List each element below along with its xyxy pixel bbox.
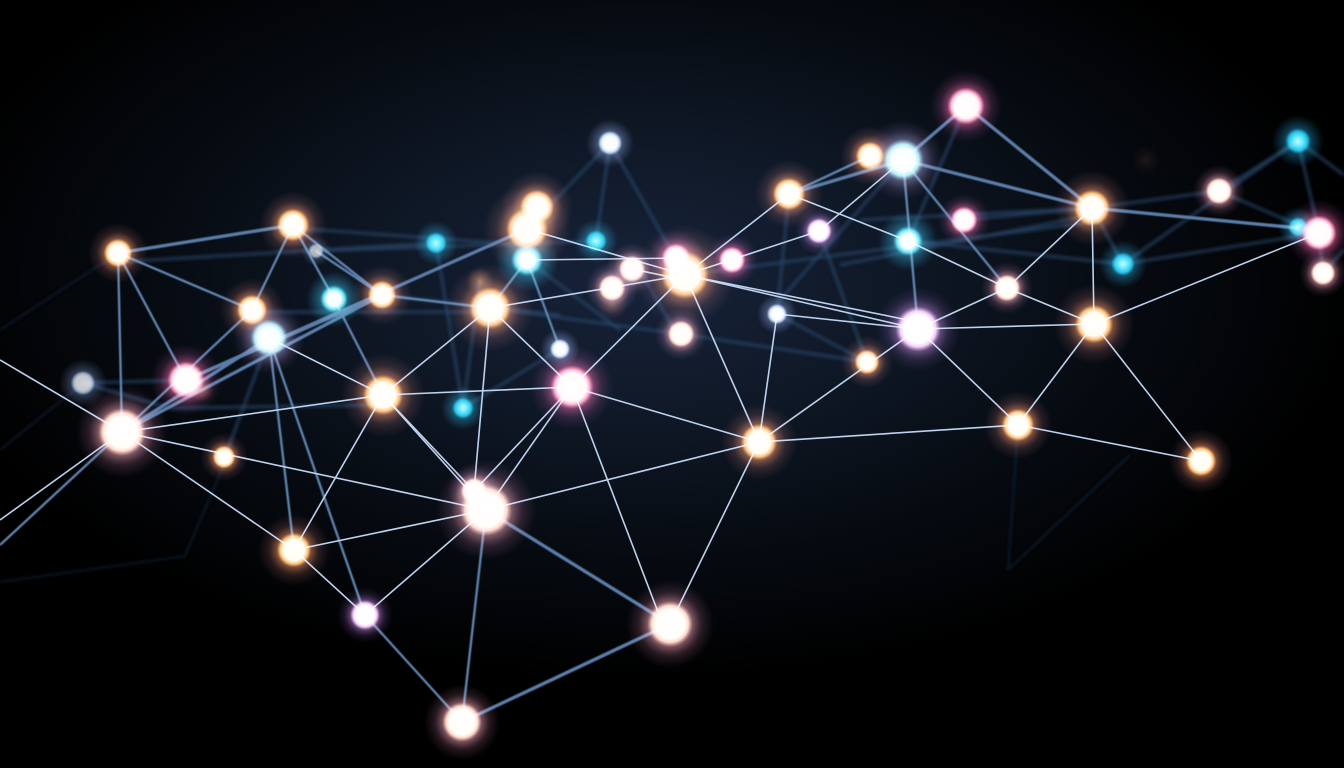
node white bbox=[1193, 165, 1245, 217]
node large white bbox=[76, 386, 168, 478]
node orange bbox=[984, 391, 1052, 459]
soft out-of-focus spots bbox=[188, 146, 1160, 402]
bright links bbox=[0, 160, 1319, 624]
node orange bbox=[501, 171, 573, 243]
node pink bbox=[938, 194, 990, 246]
node cyan bbox=[1278, 207, 1318, 247]
node orange large bbox=[446, 264, 534, 352]
node orange bbox=[88, 223, 148, 283]
node pink white bbox=[1285, 199, 1344, 267]
node large white orange bbox=[483, 185, 571, 273]
node cyan large bbox=[495, 228, 559, 292]
node faint white bbox=[301, 236, 331, 266]
node cyan bbox=[414, 221, 458, 265]
node orange small bbox=[586, 262, 638, 314]
node violet white bbox=[337, 587, 393, 643]
node white bbox=[586, 119, 634, 167]
node pink white bbox=[530, 345, 614, 429]
node white bbox=[606, 243, 658, 295]
node white bbox=[981, 262, 1033, 314]
node orange bbox=[259, 191, 327, 259]
node cyan bbox=[1099, 240, 1147, 288]
node cyan bbox=[878, 211, 938, 271]
node pink orange bbox=[706, 234, 758, 286]
node orange small bbox=[841, 336, 893, 388]
node orange bbox=[840, 126, 900, 186]
node orange large bbox=[1054, 284, 1134, 364]
node orange bbox=[220, 278, 284, 342]
node orange bbox=[258, 514, 330, 586]
node orange bbox=[721, 404, 797, 480]
node small top hub bbox=[648, 230, 704, 286]
node large white pink bbox=[626, 580, 714, 668]
node pink bbox=[150, 344, 222, 416]
node large pink white bbox=[876, 287, 960, 371]
node cyan bbox=[574, 219, 618, 263]
node cyan bbox=[1272, 115, 1324, 167]
thick links bbox=[118, 106, 1298, 722]
node hub bbox=[635, 225, 735, 325]
node white small bbox=[757, 294, 797, 334]
node orange small bbox=[200, 433, 248, 481]
node white blue bbox=[233, 302, 305, 374]
node orange bbox=[1169, 429, 1233, 493]
node white bbox=[540, 329, 580, 369]
node orange large bbox=[341, 353, 425, 437]
node violet bbox=[795, 207, 843, 255]
node orange bbox=[352, 265, 412, 325]
node pink small bbox=[655, 308, 707, 360]
node pink white bbox=[930, 70, 1002, 142]
node orange bbox=[755, 160, 823, 228]
node white orange bbox=[424, 684, 500, 760]
node cyan bbox=[441, 386, 485, 430]
distant faint links bbox=[0, 253, 1130, 582]
background links bbox=[83, 106, 1344, 457]
node cyan bbox=[306, 271, 362, 327]
node white blue bbox=[59, 359, 107, 407]
node white cyan bbox=[863, 120, 943, 200]
node orange bbox=[1054, 170, 1130, 246]
node white bbox=[1299, 249, 1344, 297]
mid links bbox=[0, 156, 1007, 722]
node small white bbox=[448, 465, 500, 517]
node large white bbox=[436, 460, 536, 560]
